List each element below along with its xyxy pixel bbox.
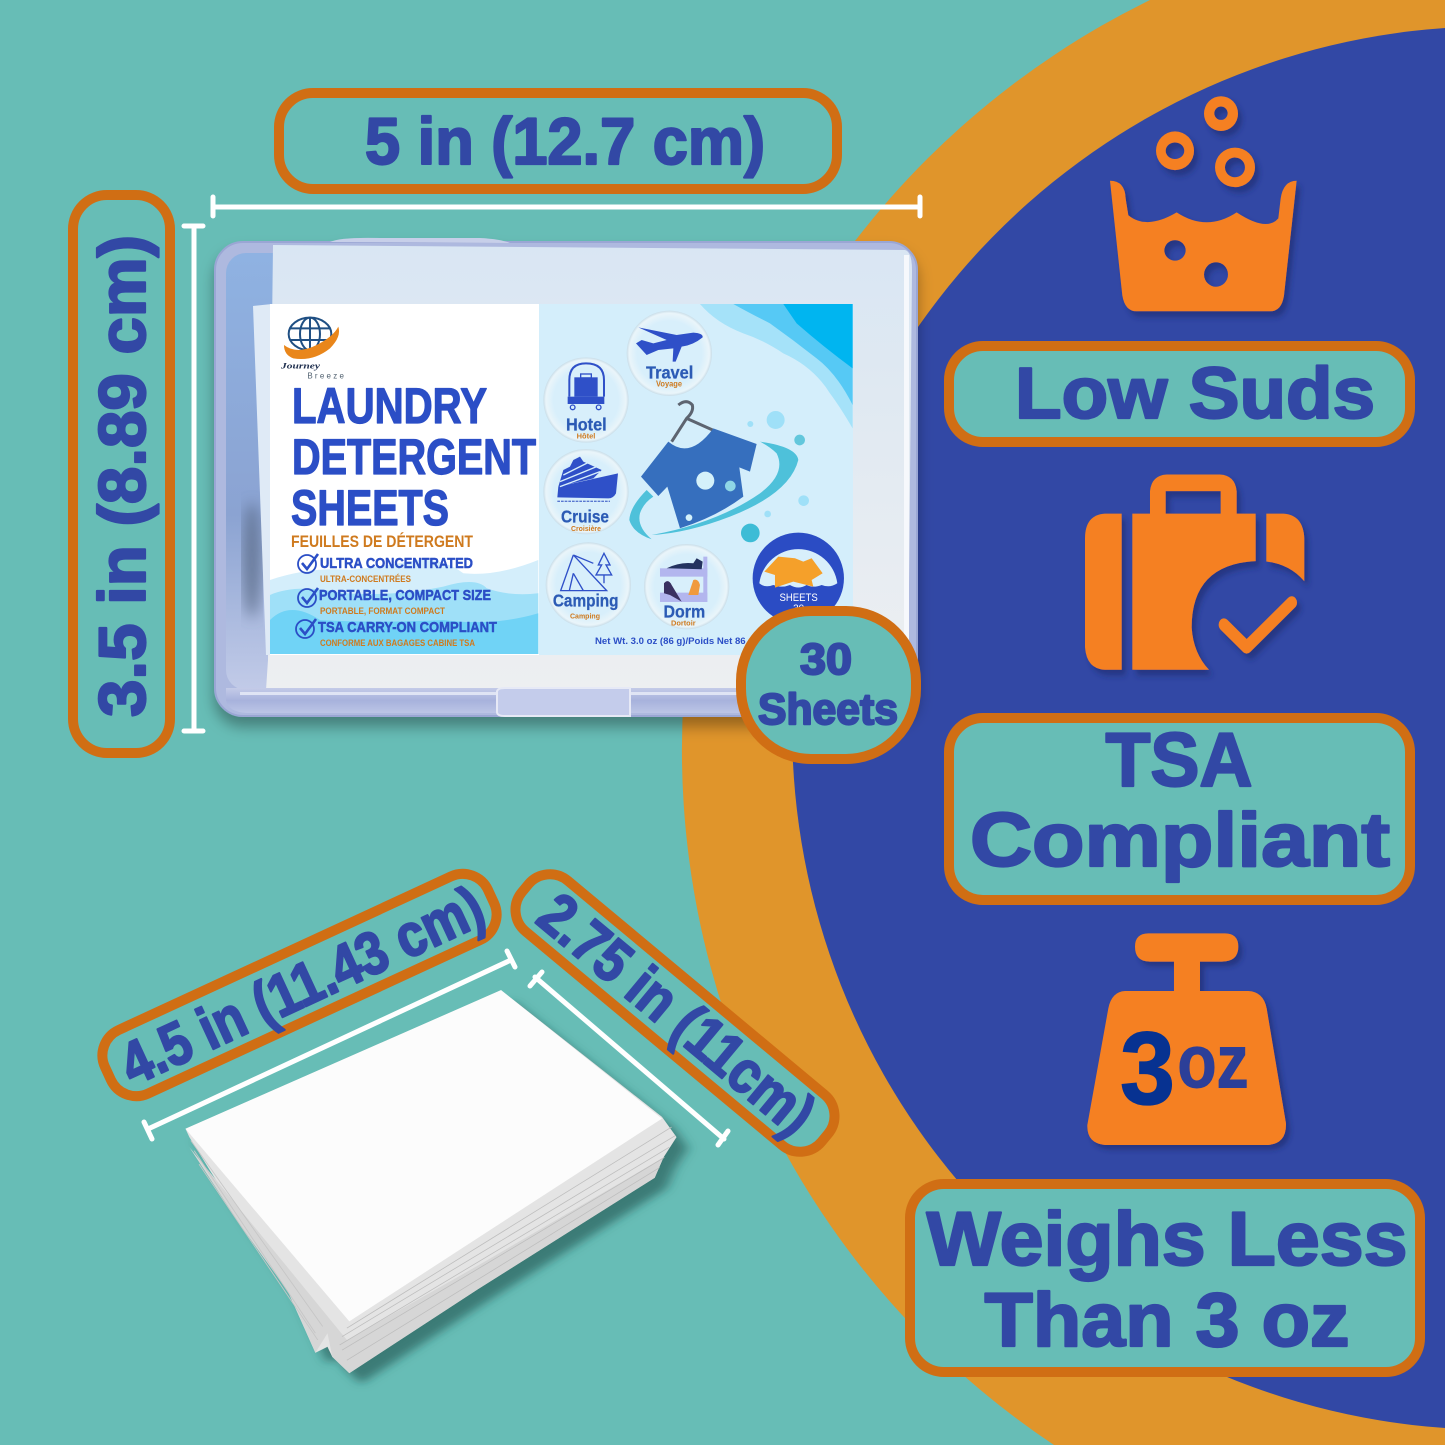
logo: Breeze [307, 371, 345, 380]
label title: SHEETS [291, 480, 449, 536]
box interior [226, 253, 908, 690]
sheets badge: SHEETS [779, 592, 818, 604]
top sheet [185, 990, 662, 1321]
width label: 5 in [279, 93, 837, 189]
bubble: cruise: Croisière [571, 524, 601, 533]
label: 4.5 in: 4.5 in (11.43 cm) [110, 873, 494, 1098]
count badge: 30 sheets: 30 [800, 635, 852, 684]
bubble: travel: Travel [646, 362, 693, 382]
label title: DETERGENT [292, 429, 536, 485]
blue circle [792, 28, 1445, 1428]
label feature list: TSA CARRY-ON COMPLIANT [318, 619, 497, 636]
net weight: Net Wt. 3.0 oz (86 g)/Poids Net 86 [595, 636, 746, 646]
icon: basin with suds [1110, 96, 1297, 311]
label feature list: ULTRA CONCENTRATED [320, 555, 473, 572]
bubble: camping [546, 542, 631, 628]
bubble: hotel [543, 357, 629, 443]
label feature list: PORTABLE, FORMAT COMPACT [320, 606, 445, 617]
label feature list [296, 554, 497, 649]
count badge: 30 sheets: Sheets [758, 685, 898, 734]
bubble: camping: Camping [553, 591, 618, 611]
label: weighs less than 3 oz: Than 3 oz [984, 1278, 1350, 1363]
bubble: camping: Camping [570, 612, 600, 621]
sheets badge [753, 533, 844, 624]
bottom rim [226, 688, 908, 713]
label: low suds: Low Suds [1015, 354, 1375, 434]
icon: weight 3 oz [1087, 933, 1286, 1145]
bubble: hotel: Hôtel [577, 432, 595, 441]
label: weighs less than 3 oz [910, 1184, 1420, 1372]
icon: weight 3 oz: 3 [1120, 1010, 1175, 1126]
clasp [497, 688, 630, 716]
label artwork [543, 304, 853, 646]
soap bubbles [686, 411, 809, 542]
bubble: cruise [543, 449, 629, 534]
t-shirt [641, 428, 757, 528]
label: weighs less than 3 oz: Weighs Less [926, 1197, 1408, 1282]
icon: suitcase with check [1085, 475, 1304, 670]
swoosh [629, 442, 798, 539]
water wave [700, 304, 853, 428]
label: 2.75 in: 2.75 in (11cm) [526, 880, 828, 1148]
label: low suds [949, 346, 1410, 442]
bubble: dorm [644, 544, 729, 629]
height dimension line [184, 226, 203, 731]
hanger [672, 402, 713, 442]
paper stack [185, 990, 676, 1373]
height label: 3.5 in [73, 195, 170, 753]
box shell [215, 238, 917, 716]
count badge: 30 sheets [741, 611, 916, 759]
label title: FEUILLES DE DÉTERGENT [291, 532, 474, 551]
bubble: dorm: Dortoir [671, 618, 696, 627]
label title: LAUNDRY [292, 378, 487, 434]
bubble: cruise: Cruise [561, 506, 609, 526]
bubble: hotel: Hotel [566, 415, 607, 435]
label feature list: CONFORME AUX BAGAGES CABINE TSA [320, 638, 475, 649]
bubble: travel: Voyage [656, 380, 683, 389]
label feature list: PORTABLE, COMPACT SIZE [319, 587, 491, 604]
icon: weight 3 oz: oz [1177, 1019, 1249, 1103]
bubble: travel [627, 311, 712, 396]
label feature list: ULTRA-CONCENTRÉES [320, 574, 411, 585]
label: TSA compliant: Compliant [970, 798, 1390, 883]
logo: Journey [280, 361, 320, 371]
long side dimension line [144, 951, 515, 1139]
orange circle [682, 0, 1445, 1445]
bubble: dorm: Dorm [663, 601, 705, 621]
width label: 5 in: 5 in (12.7 cm) [365, 104, 765, 178]
sheets badge: 30 [793, 604, 805, 615]
label: light blue panel [539, 304, 853, 655]
right edge highlight [904, 255, 909, 685]
width dimension line [213, 197, 920, 216]
label: TSA compliant: TSA [1106, 718, 1252, 803]
waves [270, 560, 538, 654]
label title [291, 378, 536, 551]
label: TSA compliant [949, 718, 1410, 900]
shaded left edge [243, 502, 261, 618]
product: plastic box [215, 238, 917, 716]
logo [280, 318, 345, 380]
label waves and logo [270, 318, 538, 654]
height label: 3.5 in: 3.5 in (8.89 cm) [85, 235, 159, 717]
short side dimension line [530, 972, 728, 1145]
label: white panel [270, 304, 540, 655]
left sheet strip [253, 304, 272, 655]
inner sheets [266, 245, 912, 690]
